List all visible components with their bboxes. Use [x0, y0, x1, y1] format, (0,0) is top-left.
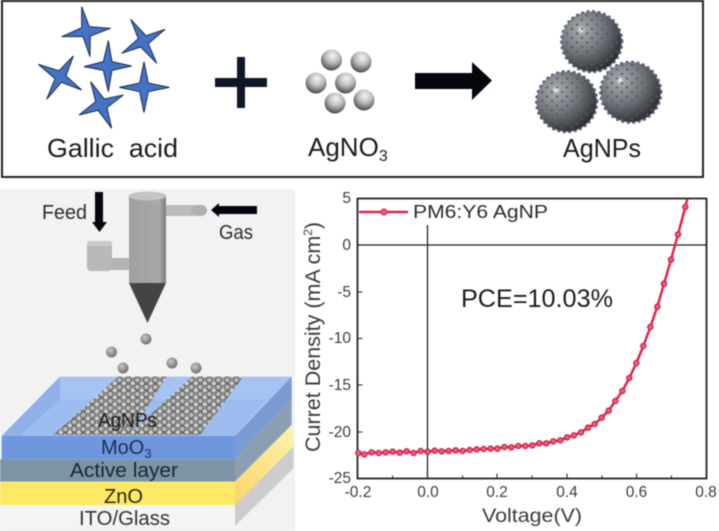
label: AgNO3: AgNO	[308, 132, 379, 162]
icon: gallic acid stars	[38, 7, 169, 128]
legend: PM6:Y6 AgNP	[413, 201, 548, 222]
y axis tick labels: -5	[337, 284, 351, 301]
arrow: reaction arrow	[415, 62, 492, 100]
x axis tick labels: 0.6	[626, 484, 647, 501]
icon: AgNP clusters	[537, 12, 661, 132]
y axis title: Curret Density (mA cm	[301, 236, 325, 452]
icon: feed box	[87, 241, 130, 271]
label: AgNPs layer: AgNPs	[98, 410, 157, 432]
x axis title: Voltage(V)	[482, 506, 582, 527]
y axis tick labels: -15	[329, 377, 351, 394]
icon: gas inlet pipe	[160, 205, 207, 216]
label: MoO3 layer: 3	[144, 446, 152, 461]
label: Active layer: Active layer	[70, 460, 178, 482]
panel: reaction scheme	[2, 1, 703, 177]
label: Feed: Feed	[42, 202, 87, 224]
annotation: PCE value: PCE=10.03%	[461, 285, 613, 313]
y axis tick labels: -10	[329, 330, 351, 347]
icon: spray nozzle	[129, 192, 166, 323]
icon: plus sign	[215, 57, 267, 108]
y axis title: )	[301, 222, 325, 229]
x axis tick labels	[345, 484, 717, 501]
label: MoO3 layer: MoO	[101, 437, 144, 459]
x axis tick labels: 0.8	[695, 484, 717, 501]
legend	[359, 201, 548, 222]
label: ITO/Glass layer: ITO/Glass	[79, 508, 170, 530]
arrow: feed	[92, 192, 107, 232]
x axis tick labels: 0.4	[556, 484, 578, 501]
y axis tick labels: 5	[342, 190, 351, 207]
label: ZnO layer: ZnO	[104, 486, 143, 508]
arrow: gas	[211, 203, 257, 217]
x axis tick labels: -0.2	[345, 484, 371, 501]
icon: AgNO3 spheres	[306, 50, 374, 114]
label: Gallic acid: Gallic acid	[47, 133, 178, 163]
y axis title: 2	[301, 229, 315, 236]
label: AgNO3: 3	[379, 148, 388, 165]
y axis tick labels: -20	[329, 424, 351, 441]
x axis tick labels: 0.2	[486, 484, 508, 501]
y axis tick labels: -25	[329, 470, 351, 487]
label: AgNPs: AgNPs	[563, 133, 641, 163]
icon: falling droplets	[106, 334, 202, 374]
J-V data line	[356, 199, 688, 457]
chart: J-V curve	[301, 190, 717, 527]
diagram: device layer stack	[0, 377, 293, 530]
AgNP stripes	[53, 377, 243, 435]
label: Gas: Gas	[219, 222, 253, 244]
y axis tick labels: 0	[342, 237, 351, 254]
y axis tick labels	[329, 190, 351, 487]
x axis tick labels: 0.0	[417, 484, 439, 501]
plot frame and zero lines	[358, 198, 706, 478]
panel: spray deposition schematic	[0, 189, 295, 531]
